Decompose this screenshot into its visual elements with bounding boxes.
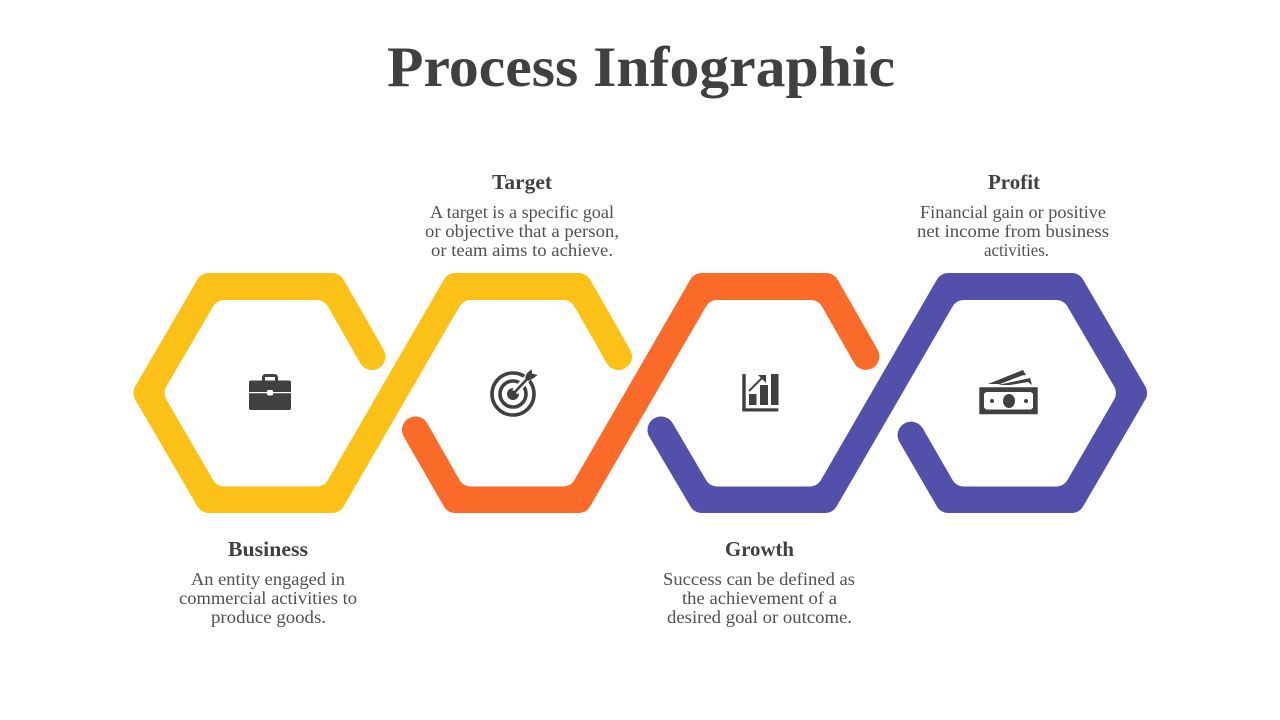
text block: Growth xyxy=(663,537,855,627)
text block: Profit: activities. xyxy=(984,240,1049,260)
purple hexagon ribbon xyxy=(647,273,1147,513)
text block: Growth: desired goal or outcome. xyxy=(667,607,852,627)
text block: Profit xyxy=(917,170,1109,260)
title: Process Infographic xyxy=(387,36,895,99)
text block: Target: A target is a specific goal xyxy=(430,202,614,222)
icon: rising bar chart xyxy=(742,374,778,412)
text block: Growth: Success can be defined as xyxy=(663,569,855,589)
text block: Profit: Profit xyxy=(988,170,1040,194)
text block: Profit: Financial gain or positive xyxy=(920,202,1106,222)
icon: target with arrow xyxy=(492,369,538,415)
icon: banknotes xyxy=(979,370,1038,414)
text block: Business xyxy=(179,537,357,627)
icon: briefcase xyxy=(249,374,291,410)
text block: Growth: the achievement of a xyxy=(682,588,837,608)
text block: Growth: Growth xyxy=(725,537,794,561)
text block: Target: or team aims to achieve. xyxy=(431,240,613,260)
yellow hexagon ribbon xyxy=(133,273,632,513)
text block: Profit: net income from business xyxy=(917,221,1109,241)
orange hexagon ribbon xyxy=(402,273,879,513)
text block: Target: or objective that a person, xyxy=(425,221,619,241)
text block: Business: produce goods. xyxy=(211,607,326,627)
text block: Business: Business xyxy=(228,537,308,561)
text block: Target: Target xyxy=(492,170,552,194)
text block: Business: An entity engaged in xyxy=(191,569,345,589)
text block: Business: commercial activities to xyxy=(179,588,357,608)
text block: Target xyxy=(425,170,619,260)
